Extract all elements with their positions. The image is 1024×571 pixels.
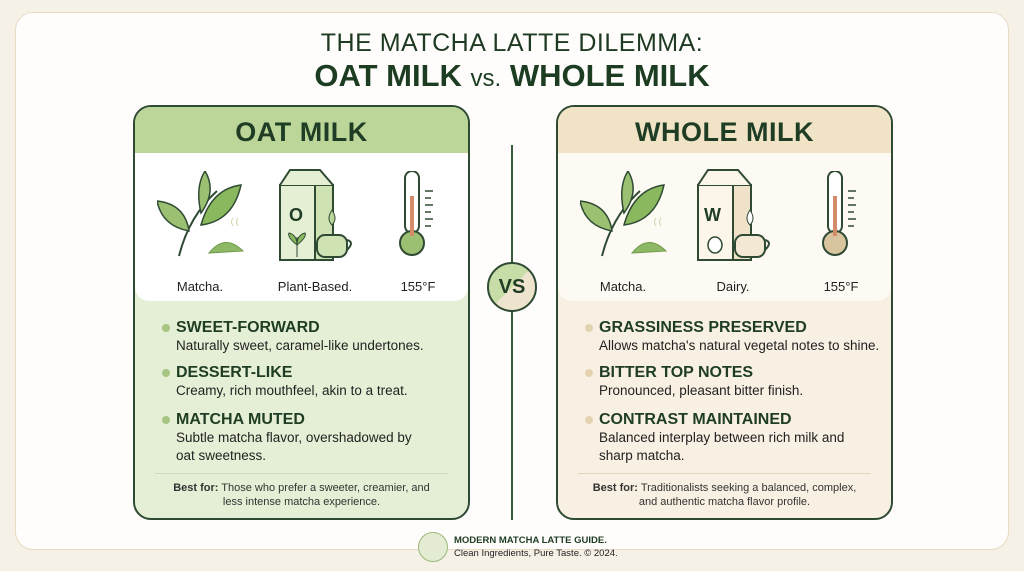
bullet: contrast maintained bbox=[585, 411, 844, 463]
bullet: sweet-forward bbox=[162, 319, 424, 353]
label: dairy: Dairy. bbox=[716, 279, 749, 294]
bullet: sweet-forward: SWEET-FORWARD bbox=[176, 319, 320, 336]
VS badge bbox=[487, 262, 537, 312]
title bbox=[314, 29, 710, 93]
footer bbox=[418, 532, 618, 562]
bullet: grassiness preserved: Allows matcha's natural vegetal notes to shine. bbox=[599, 338, 879, 353]
label: matcha: Matcha. bbox=[177, 279, 223, 294]
best for: whole: Best for: Traditionalists seeking a balanced, complex, bbox=[593, 482, 856, 494]
icon: thermometer bbox=[822, 171, 856, 256]
bullet: dessert-like: Creamy, rich mouthfeel, akin to a treat. bbox=[176, 383, 408, 398]
divider line bbox=[511, 145, 513, 520]
bullet: grassiness preserved bbox=[585, 319, 879, 353]
bullet: bitter top notes bbox=[585, 364, 803, 398]
heading: whole milk: WHOLE MILK bbox=[635, 117, 814, 147]
bullet: matcha muted: MATCHA MUTED bbox=[176, 411, 305, 428]
bullet: dessert-like: DESSERT-LIKE bbox=[176, 364, 292, 381]
label: plant-based: Plant-Based. bbox=[278, 279, 352, 294]
best for: whole bbox=[593, 482, 856, 508]
best for: oat: less intense matcha experience. bbox=[223, 496, 380, 508]
panel: oat milk bbox=[133, 105, 470, 520]
icon row: whole milk bbox=[558, 153, 891, 301]
footer text bbox=[454, 535, 618, 559]
best for: whole: and authentic matcha flavor profile. bbox=[639, 496, 810, 508]
bullet: bitter top notes: BITTER TOP NOTES bbox=[599, 364, 753, 381]
heading: oat milk bbox=[135, 107, 468, 153]
footer text: Clean Ingredients, Pure Taste. © 2024. bbox=[454, 548, 618, 559]
icon: plant-based carton: O bbox=[289, 205, 303, 225]
bullet: contrast maintained: Balanced interplay between rich milk and bbox=[599, 430, 844, 445]
best for: oat bbox=[173, 482, 430, 508]
icon: dairy carton bbox=[697, 169, 770, 261]
panel: whole milk bbox=[556, 105, 893, 520]
icon: plant-based carton bbox=[279, 169, 352, 261]
bullet: matcha muted bbox=[162, 411, 412, 463]
bullet: contrast maintained: sharp matcha. bbox=[599, 448, 685, 463]
heading: oat milk: OAT MILK bbox=[235, 117, 368, 147]
icon: dairy carton: W bbox=[704, 205, 721, 225]
icon: thermometer bbox=[399, 171, 433, 256]
bullet: matcha muted: Subtle matcha flavor, overshadowed by bbox=[176, 430, 412, 445]
bullet: sweet-forward: Naturally sweet, caramel-like undertones. bbox=[176, 338, 424, 353]
bullet: bitter top notes: Pronounced, pleasant bitter finish. bbox=[599, 383, 803, 398]
icon row: oat milk bbox=[135, 153, 468, 301]
footer text: MODERN MATCHA LATTE GUIDE. bbox=[454, 535, 607, 546]
title: OAT MILK vs. WHOLE MILK bbox=[314, 58, 710, 93]
VS badge: VS bbox=[499, 276, 525, 298]
label: temperature: 155°F bbox=[401, 279, 435, 294]
bullet: dessert-like bbox=[162, 364, 408, 398]
bullet: contrast maintained: CONTRAST MAINTAINED bbox=[599, 411, 792, 428]
bullet: grassiness preserved: GRASSINESS PRESERVED bbox=[599, 319, 807, 336]
icon: matcha leaves bbox=[580, 171, 667, 256]
best for: oat: Best for: Those who prefer a sweeter, creamier, and bbox=[173, 482, 430, 494]
icon: matcha leaves bbox=[157, 171, 244, 256]
label: matcha: Matcha. bbox=[600, 279, 646, 294]
icon: whisk bbox=[418, 532, 448, 562]
title: THE MATCHA LATTE DILEMMA: bbox=[321, 29, 703, 57]
bullet: matcha muted: oat sweetness. bbox=[176, 448, 266, 463]
label: temperature: 155°F bbox=[824, 279, 858, 294]
heading: whole milk bbox=[558, 107, 891, 153]
